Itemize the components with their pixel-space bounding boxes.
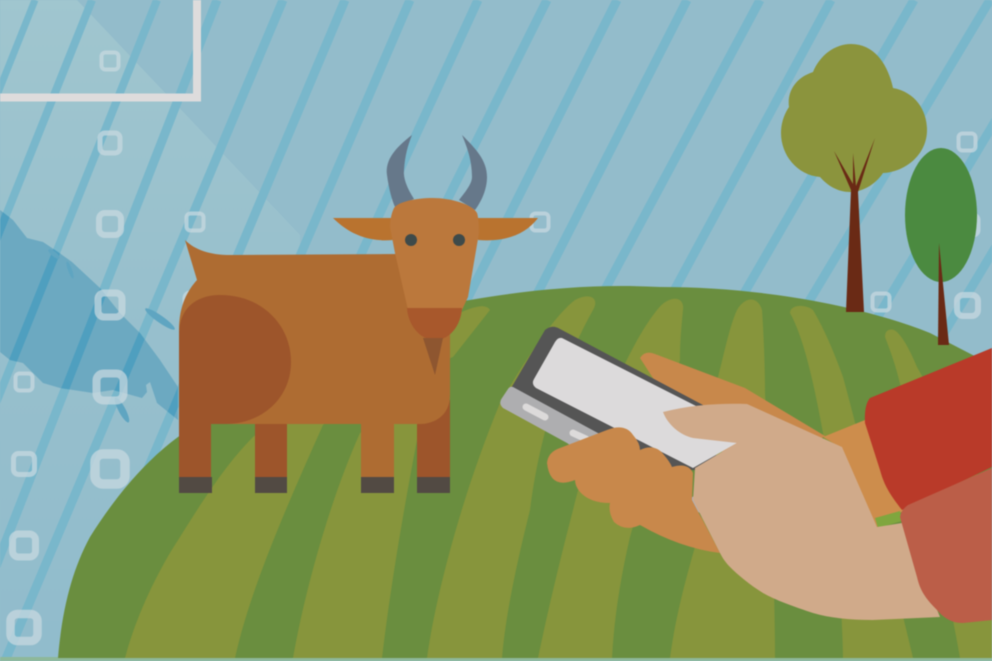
hands holding phone <box>500 327 992 623</box>
red sleeve upper <box>865 348 992 510</box>
phone lower edge <box>680 495 700 513</box>
cow head <box>390 198 479 310</box>
back hand thumb <box>640 353 825 480</box>
window frame outline <box>0 0 197 98</box>
back arm wrist <box>823 420 905 527</box>
tree crown <box>905 148 977 282</box>
tree crown <box>781 44 927 192</box>
cow hooves <box>179 477 450 493</box>
phone dark body <box>510 327 720 470</box>
red sleeve lower <box>900 468 992 623</box>
phone <box>500 327 737 513</box>
tree trunk <box>938 243 949 345</box>
ground strip <box>0 657 992 661</box>
cow <box>179 135 538 493</box>
phone buttons <box>526 407 586 439</box>
cow haunch <box>179 295 291 424</box>
field furrows <box>125 296 992 658</box>
cow body <box>179 240 450 424</box>
tree: green oval <box>905 148 977 345</box>
cow ears <box>333 218 538 240</box>
front fingers <box>547 427 720 553</box>
faded map silhouette <box>0 210 178 423</box>
tree: olive round <box>781 44 927 312</box>
phone screen <box>533 338 737 468</box>
cow eyes <box>405 234 465 246</box>
phone gray base <box>500 387 620 470</box>
map darker stripes <box>0 212 178 416</box>
green hill <box>58 286 992 658</box>
tree trunk <box>834 138 875 312</box>
map islands <box>47 248 177 424</box>
cow legs <box>179 400 450 479</box>
map main landmass <box>0 210 178 420</box>
lighter diagonal sky panel <box>0 0 300 661</box>
front hand <box>663 404 940 620</box>
cow beard <box>423 338 443 375</box>
cow muzzle <box>407 308 462 340</box>
watch band <box>875 511 902 528</box>
cow horns <box>387 135 487 210</box>
